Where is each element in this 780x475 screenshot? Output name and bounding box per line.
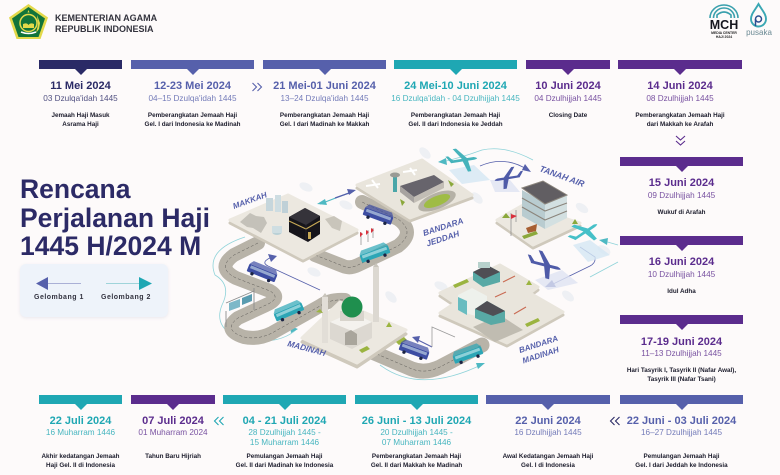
timeline item: 16 Juni 2024: 16 Juni 2024 <box>649 256 714 268</box>
timeline item: 04 - 21 Juli 2024: Gel. II dari Madinah ke Indonesia <box>236 462 333 469</box>
timeline item: 12-23 Mei 2024: 12-23 Mei 2024 <box>154 80 231 92</box>
icon: Jeddah terminal <box>390 172 459 216</box>
timeline item: 14 Juni 2024 <box>618 60 742 128</box>
flags <box>360 228 374 245</box>
road: Makkah to Jeddah <box>315 202 407 267</box>
timeline item: 21 Mei-01 Juni 2024: 13–24 Dzulqa'idah 1445 <box>280 94 369 103</box>
timeline item: 14 Juni 2024: 08 Dzulhijjah 1445 <box>646 94 714 103</box>
timeline item: 21 Mei-01 Juni 2024: Pemberangkatan Jemaah Haji <box>280 112 369 118</box>
title: Perjalanan Haji <box>20 202 210 232</box>
platform: Bandara Jeddah <box>357 160 472 221</box>
timeline item: 04 - 21 Juli 2024 <box>223 395 346 469</box>
legend: Gelombang 2 <box>101 277 152 301</box>
timeline item: 22 Juni - 03 Juli 2024: 22 Juni - 03 Juli 2024 <box>627 415 736 427</box>
label: Bandara Jeddah: JEDDAH <box>425 228 461 248</box>
timeline item: 12-23 Mei 2024: Pemberangkatan Jemaah Haji <box>148 112 237 118</box>
timeline item: 11 Mei 2024: 03 Dzulqa'idah 1445 <box>43 94 118 103</box>
timeline item: 26 Juni - 13 Juli 2024: 20 Dzulhijjah 1445 - <box>380 428 453 437</box>
heading: ministry name <box>55 12 157 34</box>
timeline item: 16 Juni 2024: Idul Adha <box>667 288 696 294</box>
timeline item: 12-23 Mei 2024: 04–15 Dzulqa'idah 1445 <box>148 94 237 103</box>
logo: MCH Media Center Haji: HAJI 2024 <box>716 35 732 39</box>
timeline item: 12-23 Mei 2024 <box>131 60 254 128</box>
timeline item: 22 Juli 2024: Akhir kedatangan Jemaah <box>41 452 120 460</box>
timeline item: 07 Juli 2024 <box>131 395 215 460</box>
timeline item: 22 Juni - 03 Juli 2024: Gel. I dari Jeddah ke Indonesia <box>635 462 728 469</box>
timeline item: 07 Juli 2024: 01 Muharram 2024 <box>138 428 208 437</box>
timeline item: 15 Juni 2024: 15 Juni 2024 <box>649 177 714 189</box>
timeline item: 11 Mei 2024: Jemaah Haji Masuk <box>51 112 110 118</box>
label: Bandara Madinah: MADINAH <box>521 345 560 365</box>
road: Madinah to Bandara Madinah <box>372 345 482 371</box>
timeline item: 07 Juli 2024: Tahun Baru Hijriah <box>145 452 201 460</box>
road: Makkah to Madinah <box>225 243 345 338</box>
timeline item: 22 Juni 2024: Gel. I di Indonesia <box>521 462 575 469</box>
timeline item: 10 Juni 2024 <box>526 60 610 118</box>
icon: Kaaba <box>289 208 320 242</box>
label: Bandara Madinah: BANDARA <box>518 334 559 355</box>
logo: MCH Media Center Haji: MEDIA CENTER <box>711 31 737 35</box>
label: Tanah Air: TANAH AIR <box>538 163 586 189</box>
timeline item: 15 Juni 2024 <box>620 157 743 216</box>
timeline item: 11 Mei 2024: 11 Mei 2024 <box>50 80 111 92</box>
arrow: chevrons left navy <box>610 416 620 426</box>
logo: MCH Media Center Haji <box>709 4 739 39</box>
timeline item: 14 Juni 2024: Pemberangkatan Jemaah Haji <box>635 112 725 118</box>
timeline item: 22 Juni 2024: 16 Dzulhijjah 1445 <box>514 428 582 437</box>
timeline item: 24 Mei-10 Juni 2024: 16 Dzulqa'idah - 04 Dzulhijjah 1445 <box>391 94 520 103</box>
timeline item: 24 Mei-10 Juni 2024: Gel. II dari Indonesia ke Jeddah <box>408 121 503 128</box>
legend: Gelombang 2: Gelombang 2 <box>101 294 151 301</box>
timeline item: 15 Juni 2024: Wukuf di Arafah <box>658 208 705 216</box>
timeline item: 22 Juni - 03 Juli 2024: Pemulangan Jemaah Haji <box>644 452 719 460</box>
timeline item: 22 Juli 2024: 22 Juli 2024 <box>50 415 111 427</box>
timeline item: 15 Juni 2024: 09 Dzulhijjah 1445 <box>648 191 715 200</box>
timeline item: 14 Juni 2024: dari Makkah ke Arafah <box>647 121 713 128</box>
timeline item: 21 Mei-01 Juni 2024: 21 Mei-01 Juni 2024 <box>273 80 376 92</box>
timeline item: 22 Juni - 03 Juli 2024: 16–27 Dzulhijjah 1445 <box>641 428 722 437</box>
timeline item: 22 Juni 2024: 22 Juni 2024 <box>515 415 581 427</box>
timeline item: 07 Juli 2024: 07 Juli 2024 <box>142 415 204 427</box>
timeline item: 04 - 21 Juli 2024: 04 - 21 Juli 2024 <box>243 415 326 427</box>
heading: ministry name: REPUBLIK INDONESIA <box>55 24 154 34</box>
timeline item: 21 Mei-01 Juni 2024: Gel. I dari Madinah ke Makkah <box>280 121 369 128</box>
logo: pusaka: pusaka <box>746 28 772 37</box>
timeline item: 16 Juni 2024: 10 Dzulhijjah 1445 <box>648 270 715 279</box>
timeline item: 22 Juli 2024 <box>39 395 122 469</box>
title: Rencana <box>20 174 130 204</box>
timeline item: 26 Juni - 13 Juli 2024: Gel. II dari Makkah ke Madinah <box>371 462 462 469</box>
timeline item: 26 Juni - 13 Juli 2024: 26 Juni - 13 Juli 2024 <box>362 415 471 427</box>
timeline item: 10 Juni 2024: Closing Date <box>549 112 587 118</box>
buses <box>246 203 484 366</box>
platform: Makkah <box>230 195 357 261</box>
legend: Gelombang 1 <box>34 277 84 301</box>
timeline item: 17-19 Juni 2024: 17-19 Juni 2024 <box>641 336 722 348</box>
legend panel <box>20 264 168 317</box>
arrow: chevrons left teal <box>214 416 224 426</box>
timeline item: 22 Juni - 03 Juli 2024 <box>620 395 743 469</box>
timeline item: 22 Juli 2024: 16 Muharram 1446 <box>46 428 115 437</box>
timeline item: 24 Mei-10 Juni 2024 <box>391 60 520 128</box>
label: Madinah: MADINAH <box>286 338 328 358</box>
label: Bandara Jeddah: BANDARA <box>422 215 465 238</box>
arrow: chevrons right <box>252 82 262 92</box>
timeline item: 11 Mei 2024 <box>39 60 122 128</box>
timeline item: 26 Juni - 13 Juli 2024: Pemberangkatan Jemaah Haji <box>372 452 461 460</box>
timeline item: 17-19 Juni 2024: 11–13 Dzulhijjah 1445 <box>641 349 722 358</box>
timeline item: 17-19 Juni 2024: Hari Tasyrik I, Tasyrik II (Nafar Awal), <box>627 367 736 374</box>
timeline item: 21 Mei-01 Juni 2024 <box>263 60 386 128</box>
signposts <box>226 288 254 327</box>
timeline item: 14 Juni 2024: 14 Juni 2024 <box>647 80 713 92</box>
timeline item: 10 Juni 2024: 10 Juni 2024 <box>535 80 601 92</box>
icon: Tanah Air building <box>511 181 567 236</box>
timeline item: 24 Mei-10 Juni 2024: 24 Mei-10 Juni 2024 <box>404 80 507 92</box>
timeline item: 04 - 21 Juli 2024: 28 Dzulhijjah 1445 - <box>248 428 321 437</box>
timeline item: 22 Juli 2024: Haji Gel. II di Indonesia <box>46 462 115 469</box>
platform: Tanah Air <box>497 205 580 248</box>
timeline item: 12-23 Mei 2024: Gel. I dari Indonesia ke Madinah <box>145 121 240 128</box>
logo: MCH Media Center Haji: MCH <box>710 18 738 32</box>
timeline item: 17-19 Juni 2024 <box>620 315 743 383</box>
heading: ministry name: KEMENTERIAN AGAMA <box>55 12 157 22</box>
timeline item: 04 - 21 Juli 2024: Pemulangan Jemaah Haji <box>247 452 322 460</box>
logo: Kementerian Agama <box>9 4 48 39</box>
timeline item: 26 Juni - 13 Juli 2024 <box>355 395 478 469</box>
label: Makkah: MAKKAH <box>232 190 268 211</box>
timeline item: 24 Mei-10 Juni 2024: Pemberangkatan Jemaah Haji <box>411 112 500 118</box>
title: 1445 H/2024 M <box>20 231 201 261</box>
arrow: chevrons down <box>676 136 686 146</box>
timeline item: 22 Juni 2024: Awal Kedatangan Jemaah Haji <box>503 452 593 460</box>
icon: Madinah mosque <box>316 263 407 353</box>
icon: Bandara Madinah buildings <box>458 262 505 325</box>
logo: pusaka <box>746 2 772 37</box>
clouds <box>298 145 612 305</box>
legend: Gelombang 1: Gelombang 1 <box>34 294 84 301</box>
timeline item: 26 Juni - 13 Juli 2024: 07 Muharram 1446 <box>382 438 451 447</box>
planes <box>445 146 610 290</box>
timeline item: 11 Mei 2024: Asrama Haji <box>62 121 99 128</box>
timeline item: 22 Juni 2024 <box>486 395 610 469</box>
platform: Bandara Madinah <box>440 265 563 346</box>
title <box>20 174 210 261</box>
timeline item: 16 Juni 2024 <box>620 236 743 294</box>
illustration: hajj route map <box>212 148 618 380</box>
timeline item: 04 - 21 Juli 2024: 15 Muharram 1446 <box>250 438 319 447</box>
timeline item: 17-19 Juni 2024: Tasyrik III (Nafar Tsani) <box>647 376 716 383</box>
arrows: route lines <box>213 149 618 380</box>
platform: Madinah <box>302 302 406 367</box>
timeline item: 10 Juni 2024: 04 Dzulhijjah 1445 <box>534 94 602 103</box>
